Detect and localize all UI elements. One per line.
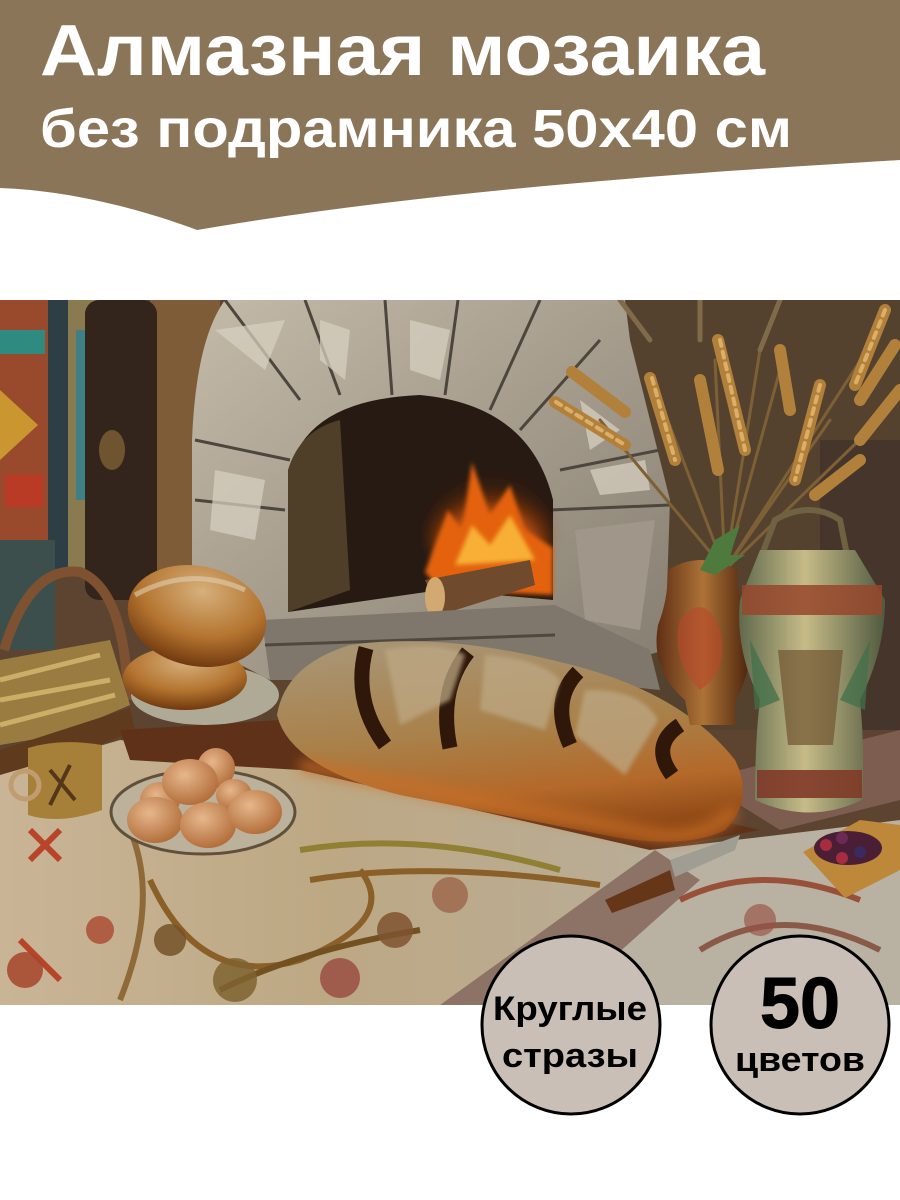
title: Алмазная мозаика: [40, 11, 766, 91]
painting background wall: [0, 300, 900, 850]
header banner: [0, 0, 900, 230]
fire: [425, 462, 553, 595]
ornate jar: [739, 510, 885, 812]
berry basket: [803, 820, 900, 898]
knife: [605, 835, 740, 913]
subtitle: без подрамника 50х40 см: [40, 99, 792, 159]
plate with eggs: [111, 748, 295, 854]
oven opening: [288, 395, 553, 612]
painting: bread by the oven: [0, 300, 900, 1005]
badge: round rhinestones: стразы: [502, 1037, 638, 1075]
tablecloth: [0, 720, 900, 1005]
badge: round rhinestones: [482, 936, 660, 1114]
badge: round rhinestones: Круглые: [493, 990, 647, 1028]
stone oven: [192, 300, 670, 690]
badge: 50 colours: 50: [760, 964, 840, 1044]
log: [425, 560, 535, 615]
basket with wheat: [0, 571, 135, 780]
painted vase: [657, 525, 750, 725]
badge: 50 colours: цветов: [735, 1041, 865, 1079]
folk textile on left wall: [0, 300, 157, 650]
hearth: [262, 605, 660, 690]
buns on a plate: [123, 565, 279, 725]
cup: [11, 742, 102, 819]
badge: 50 colours: [711, 936, 889, 1114]
wheat sheaf: [555, 300, 900, 570]
large loaf: [277, 641, 743, 842]
cloth embroidery: [20, 830, 880, 1000]
